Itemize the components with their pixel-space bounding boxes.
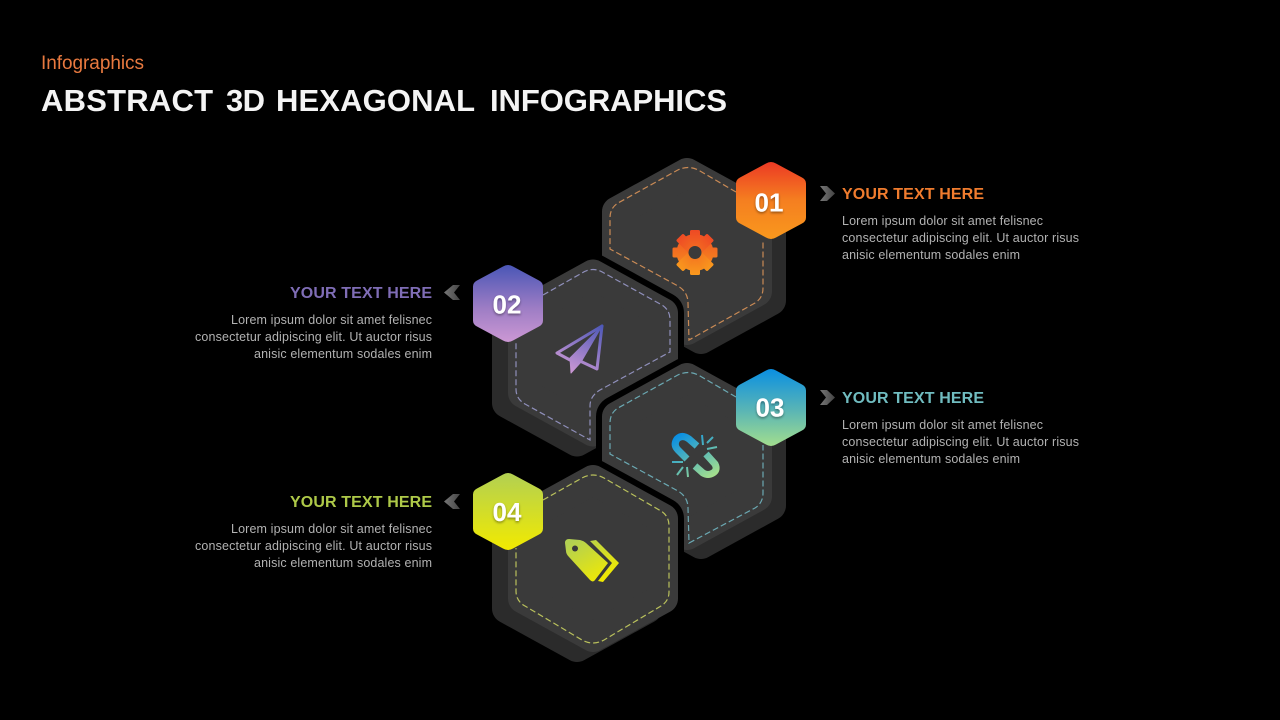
text block 04: YOUR TEXT HERE	[290, 494, 432, 511]
badge 01: 01	[755, 188, 783, 218]
text block 04	[195, 494, 432, 570]
text block 01: anisic elementum sodales enim	[842, 248, 1020, 262]
text block 04: Lorem ipsum dolor sit amet felisnec	[231, 522, 432, 536]
subtitle: Infographics	[41, 53, 144, 74]
text block 01: Lorem ipsum dolor sit amet felisnec	[842, 214, 1043, 228]
icon: paper plane	[557, 326, 602, 373]
text block 03: consectetur adipiscing elit. Ut auctor risus	[842, 435, 1079, 449]
hexagon 2 panel	[507, 270, 670, 442]
arrow 04	[444, 494, 460, 509]
text block 01	[842, 186, 1079, 262]
text block 04: consectetur adipiscing elit. Ut auctor risus	[195, 539, 432, 553]
icon: price tags	[565, 539, 619, 582]
icon: broken link	[672, 435, 717, 477]
text block 03: YOUR TEXT HERE	[842, 390, 984, 407]
text block 01: consectetur adipiscing elit. Ut auctor risus	[842, 231, 1079, 245]
title	[41, 83, 727, 118]
text block 02: consectetur adipiscing elit. Ut auctor risus	[195, 330, 432, 344]
badge 03: 03	[756, 392, 784, 422]
title: HEXAGONAL	[276, 83, 475, 118]
text block 02: YOUR TEXT HERE	[290, 285, 432, 302]
text block 02: anisic elementum sodales enim	[254, 347, 432, 361]
text block 04: anisic elementum sodales enim	[254, 556, 432, 570]
text block 02	[195, 285, 432, 361]
icon: gear	[672, 230, 718, 275]
text block 01: YOUR TEXT HERE	[842, 186, 984, 203]
title: ABSTRACT	[41, 83, 213, 118]
hexagon 1 panel	[610, 168, 771, 340]
badge 02: 02	[493, 290, 521, 320]
badge 02	[473, 265, 543, 342]
badge 04: 04	[493, 497, 522, 527]
hexagon 3 panel	[610, 372, 771, 544]
arrow 03	[820, 390, 835, 405]
text block 03: Lorem ipsum dolor sit amet felisnec	[842, 418, 1043, 432]
badge 03	[736, 369, 806, 446]
badge 01	[736, 162, 806, 239]
title: 3D	[226, 83, 265, 118]
text block 03	[842, 390, 1079, 466]
arrow 02	[444, 285, 460, 300]
text block 03: anisic elementum sodales enim	[842, 452, 1020, 466]
text block 02: Lorem ipsum dolor sit amet felisnec	[231, 313, 432, 327]
hexagon 4 panel	[507, 475, 669, 647]
arrow 01	[820, 186, 835, 201]
badge 04	[473, 473, 543, 550]
title: INFOGRAPHICS	[490, 83, 727, 118]
